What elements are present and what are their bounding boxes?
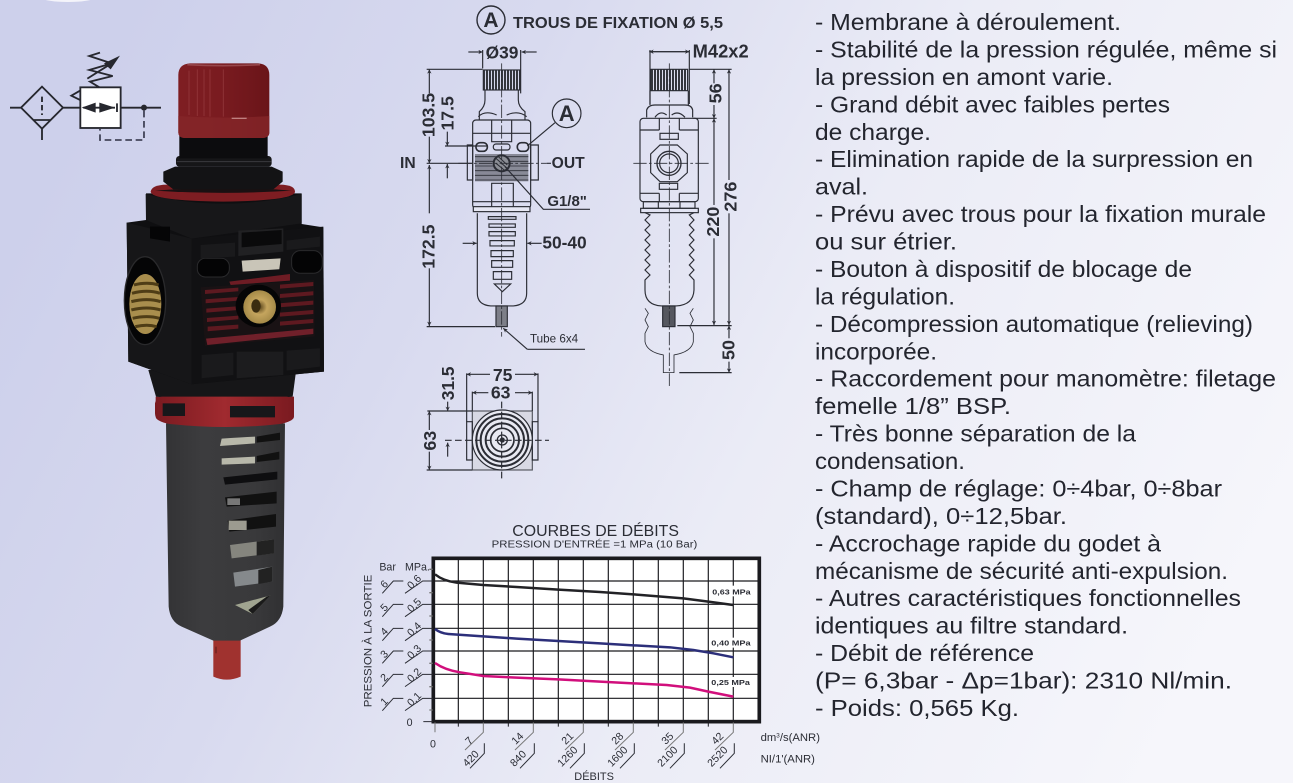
- x axis: 42: [709, 730, 726, 747]
- y axis: MPa.: [405, 562, 430, 574]
- bullet: other characteristics: identiques au filtre standard.: [815, 613, 1128, 639]
- diagram: side view with dimensions: IN: [400, 155, 416, 172]
- x axis: 0: [430, 739, 436, 751]
- bullet: high flow: - Grand débit avec faibles pertes: [815, 91, 1170, 117]
- diagram: side view with dimensions: A: [559, 101, 575, 126]
- bullet: locking knob: la régulation.: [815, 283, 955, 309]
- bullet: high flow: [815, 91, 1170, 145]
- curve: 0.40 MPa: [435, 629, 733, 657]
- y axis: [362, 562, 433, 729]
- heading: mounting holes: A: [483, 9, 499, 32]
- y axis: 0,1: [405, 690, 424, 709]
- diagram: front view with dimensions: [633, 41, 749, 386]
- bullet: bowl attachment: [815, 530, 1228, 584]
- bullet: weight: - Poids: 0,565 Kg.: [815, 695, 1019, 721]
- curve labels: 0,25 MPa: [711, 678, 751, 687]
- curve: 0.63 MPa: [435, 574, 733, 605]
- diagram: side view with dimensions: G1/8": [547, 193, 587, 210]
- bullet: regulated pressure stability: la pression en amont varie.: [815, 64, 1113, 90]
- bullet: automatic relieving: incorporée.: [815, 338, 937, 364]
- x axis: DÉBITS: [574, 770, 614, 783]
- heading: mounting holes: [477, 6, 723, 34]
- y axis: PRESSION À LA SORTIE: [362, 575, 375, 707]
- icon: pneumatic filter regulator symbol: [10, 53, 161, 140]
- bullet: adjustment range: [815, 476, 1222, 529]
- curve labels: 0,40 MPa: [711, 639, 752, 648]
- y axis: 0,4: [405, 620, 424, 639]
- curve: 0.25 MPa: [435, 663, 733, 697]
- bullet: bowl attachment: - Accrochage rapide du godet à: [815, 530, 1161, 556]
- diagram: side view with dimensions: 172.5: [419, 224, 439, 269]
- x axis: 7: [463, 735, 476, 748]
- bullet: overpressure elimination: - Elimination rapide de la surpression en: [815, 146, 1253, 172]
- bullet: gauge connection: - Raccordement pour manomètre: filetage: [815, 366, 1276, 392]
- x axis: 840: [508, 748, 529, 769]
- bullet: automatic relieving: [815, 311, 1253, 364]
- text block: features list: [815, 9, 1277, 721]
- x axis: 35: [659, 730, 676, 747]
- bullet: other characteristics: [815, 585, 1241, 639]
- y axis: Bar: [379, 562, 396, 574]
- diagram: side view with dimensions: 17.5: [437, 96, 457, 131]
- y axis: 4: [378, 625, 391, 638]
- diagram: top view with dimensions: 63: [420, 431, 440, 450]
- bullet: other characteristics: - Autres caractéristiques fonctionnelles: [815, 585, 1241, 611]
- regulator head: [124, 63, 324, 427]
- diagram: side view with dimensions: 103.5: [419, 93, 439, 137]
- chart title: COURBES DE DÉBITS: [512, 523, 679, 540]
- curve labels: [711, 587, 752, 687]
- diagram: side view with dimensions: [400, 42, 590, 349]
- bullet: wall mounting: [815, 201, 1266, 254]
- bullet: automatic relieving: - Décompression automatique (relieving): [815, 311, 1253, 337]
- bullet: locking knob: [815, 256, 1192, 309]
- diagram: side view with dimensions: Ø39: [486, 42, 518, 62]
- x axis: 28: [609, 730, 626, 747]
- diagram: front view with dimensions: 50: [719, 340, 739, 360]
- y axis: 0: [407, 717, 413, 729]
- bullet: wall mounting: ou sur étrier.: [815, 228, 957, 254]
- y axis: 0,5: [405, 596, 424, 615]
- y axis: 1: [378, 695, 391, 708]
- bullet: bowl attachment: mécanisme de sécurité anti-expulsion.: [815, 558, 1228, 584]
- x axis: [430, 722, 820, 783]
- bullet: adjustment range: (standard), 0÷12,5bar.: [815, 503, 1067, 529]
- diagram: front view with dimensions: 56: [705, 83, 725, 103]
- bullet: condensate separation: condensation.: [815, 448, 965, 474]
- y axis: 0,2: [405, 666, 424, 685]
- x axis: 1260: [555, 744, 581, 769]
- y axis: 0,3: [405, 643, 424, 662]
- diagram: top view with dimensions: 75: [493, 365, 513, 385]
- front face details: [197, 258, 229, 277]
- x axis: 21: [559, 730, 576, 747]
- x axis: 14: [509, 730, 526, 747]
- bullet: membrane: - Membrane à déroulement.: [815, 9, 1121, 35]
- bullet: reference flow: [815, 640, 1232, 694]
- bullet: wall mounting: - Prévu avec trous pour la fixation murale: [815, 201, 1266, 227]
- y axis: 3: [378, 648, 391, 661]
- diagram: top view with dimensions: 31.5: [438, 366, 458, 400]
- bullet: condensate separation: [815, 421, 1136, 474]
- bullet: condensate separation: - Très bonne séparation de la: [815, 421, 1136, 447]
- y axis: 2: [378, 671, 391, 684]
- x axis: 2520: [705, 744, 731, 769]
- x axis: 1600: [605, 744, 631, 769]
- corner highlight: [40, 0, 96, 2]
- y axis: 0,6: [405, 573, 424, 592]
- diagram: side view with dimensions: OUT: [552, 155, 585, 172]
- bullet: locking knob: - Bouton à dispositif de blocage de: [815, 256, 1192, 282]
- diagram: top view with dimensions: [420, 365, 549, 480]
- diagram: side view with dimensions: 50-40: [542, 233, 587, 253]
- diagram: front view with dimensions: M42x2: [693, 41, 749, 62]
- chart title: PRESSION D'ENTRÉE =1 MPa (10 Bar): [492, 538, 697, 551]
- filter bowl: [155, 397, 294, 680]
- x axis: /s(ANR): [780, 732, 820, 744]
- plot area: [433, 558, 759, 722]
- diagram: front view with dimensions: 276: [720, 182, 740, 212]
- bullet: overpressure elimination: aval.: [815, 174, 868, 200]
- curve labels: 0,63 MPa: [712, 587, 751, 596]
- heading: mounting holes: TROUS DE FIXATION Ø 5,5: [513, 15, 723, 32]
- bullet: reference flow: - Débit de référence: [815, 640, 1034, 666]
- x axis: dm: [761, 732, 775, 744]
- x axis: 3: [776, 734, 781, 740]
- bullet: overpressure elimination: [815, 146, 1253, 200]
- chart: flow curves: [362, 523, 820, 783]
- x axis: 2100: [655, 744, 681, 769]
- bullet: reference flow: (P= 6,3bar - Δp=1bar): 2310 Nl/min.: [815, 668, 1232, 694]
- product photo: filter regulator: [124, 63, 324, 680]
- diagram: front view with dimensions: 220: [703, 207, 723, 237]
- bullet: regulated pressure stability: - Stabilité de la pression régulée, même si: [815, 36, 1277, 62]
- diagram: top view with dimensions: 63: [491, 383, 511, 403]
- bullet: adjustment range: - Champ de réglage: 0÷4bar, 0÷8bar: [815, 476, 1222, 502]
- y axis: 5: [378, 601, 391, 614]
- x axis: 420: [461, 748, 482, 769]
- y axis: 6: [378, 578, 391, 591]
- bullet: gauge connection: [815, 366, 1276, 419]
- x axis: NI/1'(ANR): [761, 753, 815, 765]
- chart title: [492, 523, 697, 551]
- diagram: side view with dimensions: Tube 6x4: [530, 333, 579, 346]
- bullet: regulated pressure stability: [815, 36, 1277, 90]
- bullet: gauge connection: femelle 1/8” BSP.: [815, 393, 1011, 419]
- bullet: high flow: de charge.: [815, 119, 931, 145]
